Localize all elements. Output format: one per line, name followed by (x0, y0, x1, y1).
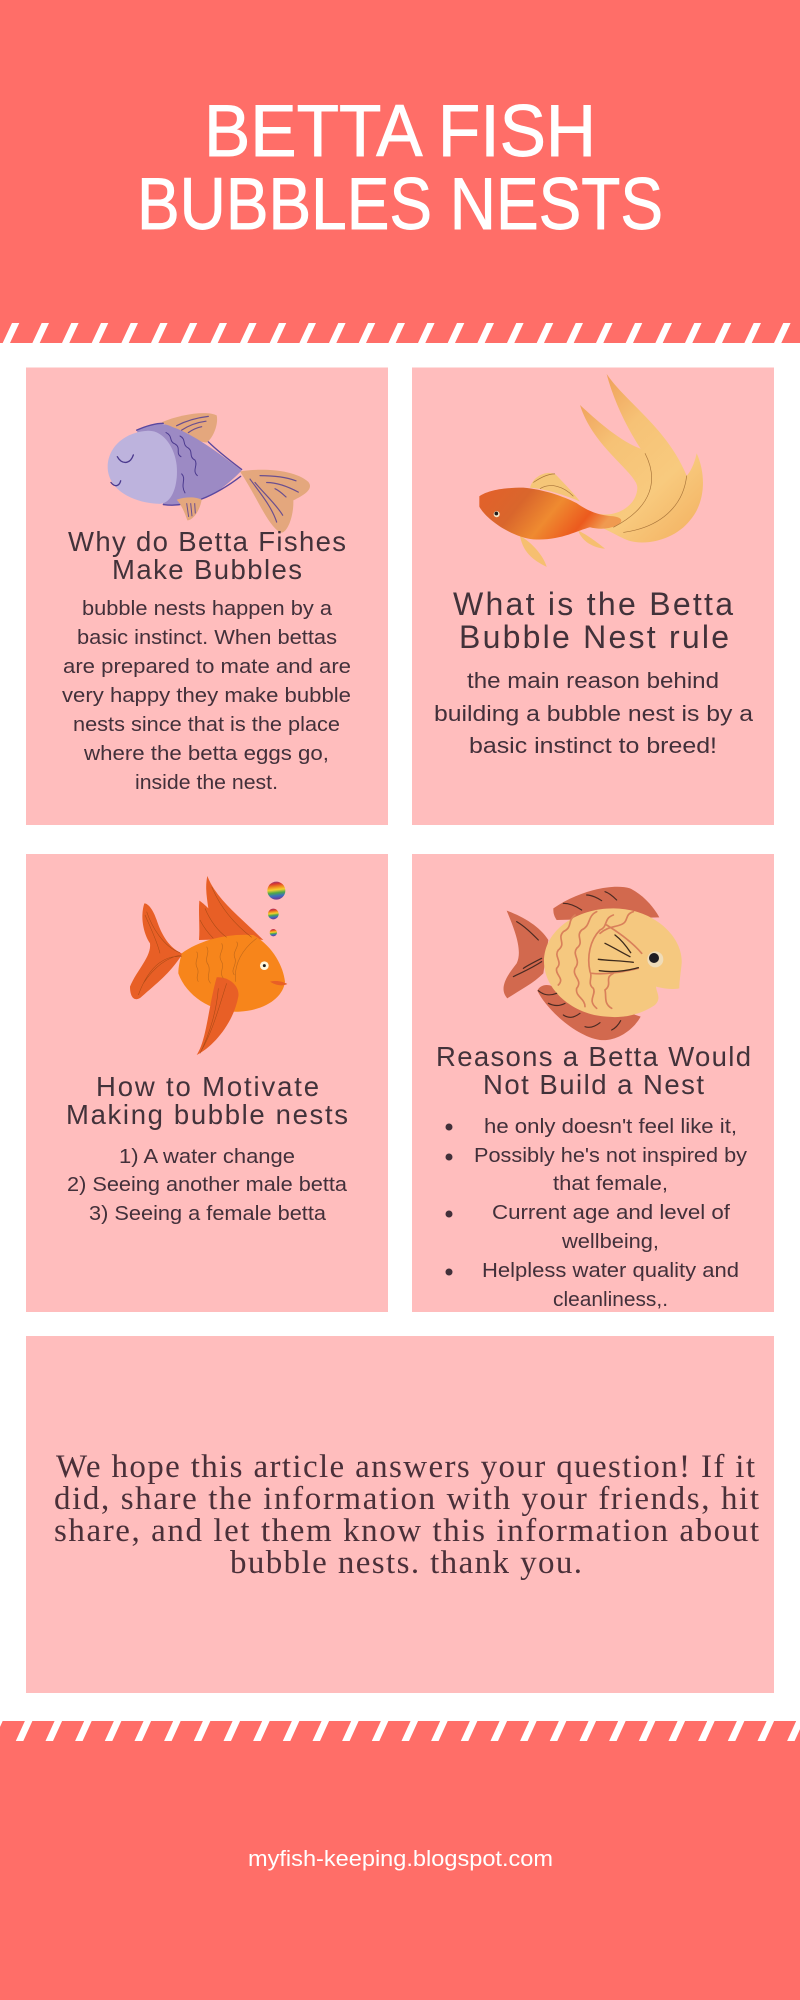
closing text: share, and let them know this information about (54, 1513, 759, 1549)
body text: basic instinct to breed! (469, 733, 717, 758)
heading (66, 1071, 348, 1130)
closing text: did, share the information with your friends, hit (54, 1481, 759, 1517)
heading (453, 586, 733, 655)
body text: the main reason behind (467, 668, 719, 693)
heading: Reasons a Betta Would (436, 1041, 751, 1072)
bullet list (446, 1115, 748, 1311)
title: BUBBLES NESTS (137, 164, 663, 245)
body text: bubble nests happen by a (82, 597, 333, 620)
footer url: myfish-keeping.blogspot.com (248, 1846, 553, 1871)
heading (436, 1041, 751, 1100)
body text: basic instinct. When bettas (77, 626, 337, 649)
body text (62, 597, 351, 794)
bullet list: Current age and level of (492, 1201, 730, 1224)
heading: Bubble Nest rule (459, 619, 729, 655)
bullet list: Helpless water quality and (482, 1259, 739, 1282)
bullet list: he only doesn't feel like it, (484, 1115, 737, 1138)
header band (0, 0, 800, 343)
icon: round yellow fish (504, 887, 682, 1040)
panel: reasons a betta would not build a nest (412, 854, 774, 1312)
panel: closing message (26, 1336, 774, 1693)
closing text: bubble nests. thank you. (230, 1545, 582, 1581)
numbered list: 1) A water change (119, 1145, 295, 1168)
body text: inside the nest. (135, 771, 278, 794)
bullet list: cleanliness,. (553, 1288, 668, 1311)
panel: why do betta fishes make bubbles (26, 368, 388, 825)
heading: How to Motivate (96, 1071, 319, 1102)
body text: where the betta eggs go, (83, 742, 329, 765)
panel: how to motivate (26, 854, 388, 1312)
bullet list: that female, (553, 1172, 668, 1195)
numbered list (67, 1145, 348, 1225)
icon: goldfish with rainbow bubbles (130, 876, 287, 1055)
numbered list: 2) Seeing another male betta (67, 1173, 348, 1196)
closing text: We hope this article answers your question! If it (56, 1449, 755, 1485)
title: BETTA FISH (204, 91, 596, 172)
closing text (54, 1449, 759, 1581)
title (137, 91, 663, 245)
body text: building a bubble nest is by a (434, 701, 754, 726)
body text: very happy they make bubble (62, 684, 351, 707)
body text: nests since that is the place (73, 713, 340, 736)
heading: What is the Betta (453, 586, 733, 622)
body text (434, 668, 754, 758)
body text: are prepared to mate and are (63, 655, 351, 678)
heading: Not Build a Nest (483, 1069, 704, 1100)
icon: purple fish (108, 413, 310, 533)
bullet list: wellbeing, (561, 1230, 659, 1253)
icon: orange watercolor fish (479, 374, 703, 567)
bullet list: Possibly he's not inspired by (474, 1144, 748, 1167)
heading: Make Bubbles (112, 554, 302, 585)
heading: Making bubble nests (66, 1099, 348, 1130)
panel: betta bubble nest rule (412, 368, 774, 825)
numbered list: 3) Seeing a female betta (89, 1202, 327, 1225)
footer band (0, 1720, 800, 2000)
heading: Why do Betta Fishes (68, 526, 346, 557)
heading (68, 526, 346, 585)
